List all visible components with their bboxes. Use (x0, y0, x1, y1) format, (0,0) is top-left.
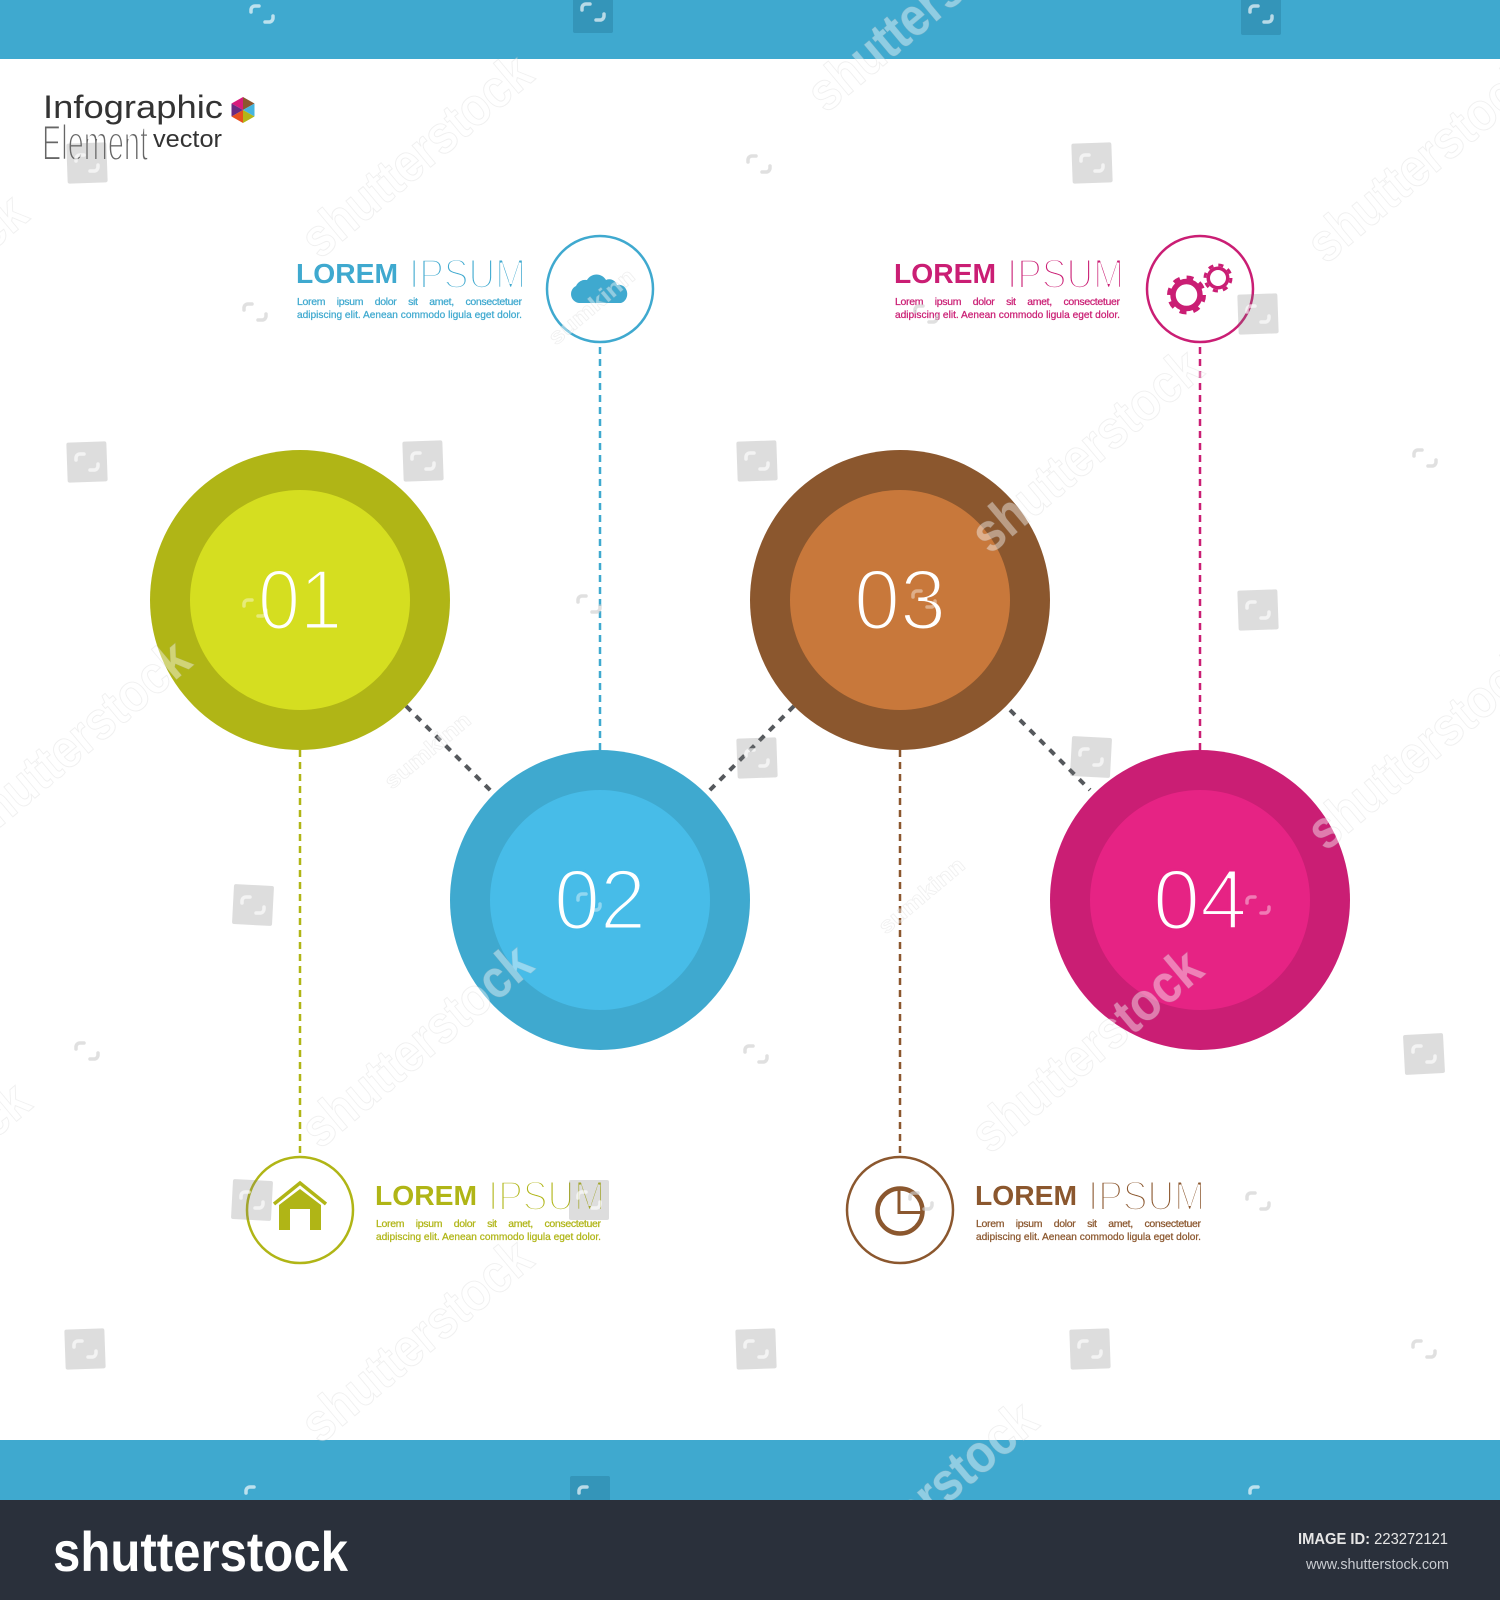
body text: adipiscing elit. Aenean commodo ligula eget dolor. (895, 309, 1120, 321)
circle 04 (1050, 750, 1350, 1050)
top blue band (0, 0, 1500, 59)
circle 04: 04 (1153, 853, 1247, 948)
icon: home (247, 1157, 353, 1263)
icon: clock (847, 1157, 953, 1263)
title: Infographic: Infographic (43, 89, 223, 125)
heading: IPSUM (409, 250, 526, 297)
heading: IPSUM (1088, 1172, 1205, 1219)
footer url: www.shutterstock.com (1305, 1556, 1449, 1573)
body text (297, 296, 522, 321)
heading: LOREM (296, 258, 398, 289)
watermark wordmarks: shutterstock (959, 336, 1214, 564)
watermark wordmarks: sumkinn (873, 852, 970, 939)
heading: LOREM (894, 258, 996, 289)
body text: adipiscing elit. Aenean commodo ligula eget dolor. (976, 1231, 1201, 1243)
body text (976, 1218, 1202, 1243)
heading: LOREM (975, 1180, 1077, 1211)
callout: brown clock (847, 1157, 1205, 1263)
title block (42, 89, 254, 171)
circle 03: 03 (854, 553, 946, 648)
callout: blue cloud (296, 236, 653, 342)
body text (376, 1218, 602, 1243)
dashed stem: pink (1199, 347, 1201, 750)
icon: cloud (547, 236, 653, 342)
heading (894, 250, 1124, 297)
circle 02 (450, 750, 750, 1050)
icon: colored hexagon (232, 97, 254, 123)
dashed stem: blue (599, 347, 601, 750)
watermark wordmarks: shutterstock (289, 931, 544, 1159)
circle 01 (150, 450, 450, 750)
body text: adipiscing elit. Aenean commodo ligula eget dolor. (297, 309, 522, 321)
heading: IPSUM (1007, 250, 1124, 297)
icon: gears (1147, 236, 1253, 342)
watermark wordmarks: shutterstock (289, 1226, 544, 1454)
watermark wordmarks: sumkinn (543, 263, 640, 350)
title: vector: vector (153, 126, 222, 153)
callout: pink gears (894, 236, 1253, 342)
heading: LOREM (375, 1180, 477, 1211)
body text (895, 296, 1120, 321)
body text: Lorem ipsum dolor sit amet, consectetuer (976, 1218, 1202, 1230)
watermark wordmarks: sumkinn (379, 707, 476, 794)
circle 02: 02 (554, 853, 646, 948)
heading: IPSUM (488, 1172, 605, 1219)
dashed stem: brown (899, 750, 901, 1153)
body text: Lorem ipsum dolor sit amet, consectetuer (895, 296, 1120, 308)
heading (975, 1172, 1205, 1219)
body text: Lorem ipsum dolor sit amet, consectetuer (376, 1218, 602, 1230)
body text: Lorem ipsum dolor sit amet, consectetuer (297, 296, 522, 308)
body text: adipiscing elit. Aenean commodo ligula eget dolor. (376, 1231, 601, 1243)
circle 03 (750, 450, 1050, 750)
title: Element: Element (42, 115, 148, 171)
circle 01: 01 (258, 553, 342, 648)
watermark wordmarks: shutterstock (289, 41, 544, 269)
heading (296, 250, 526, 297)
footer bar (0, 1500, 1500, 1600)
bottom blue band (0, 1440, 1500, 1500)
watermark wordmarks: shutterstock (959, 936, 1214, 1164)
footer wordmark: shutterstock (53, 1520, 349, 1583)
dashed stem: olive (299, 750, 301, 1153)
connector lines between circles (406, 706, 1090, 794)
heading (375, 1172, 605, 1219)
callout: olive home (247, 1157, 605, 1263)
footer image id: IMAGE ID: 223272121 (1298, 1531, 1448, 1548)
